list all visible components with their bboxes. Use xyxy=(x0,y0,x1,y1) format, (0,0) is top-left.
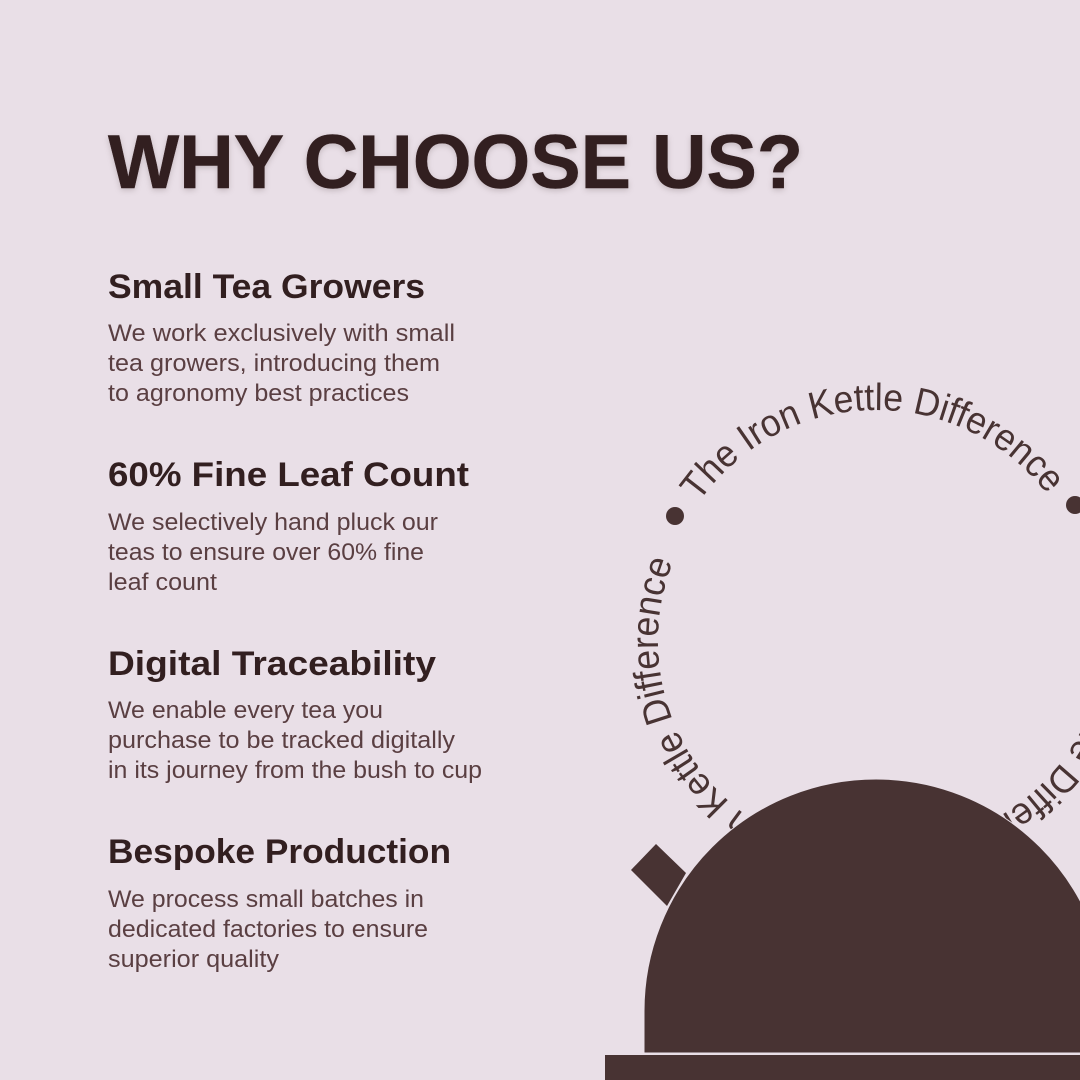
text: small tea growers description: to agronomy best practices xyxy=(108,380,409,407)
ring dot: left xyxy=(666,507,684,525)
text: fine leaf count description: teas to ensure over 60% fine xyxy=(108,539,424,566)
text: fine leaf count description: We selectively hand pluck our xyxy=(108,509,438,536)
panel: digital traceability xyxy=(108,645,482,784)
circular text ring xyxy=(632,382,1080,924)
text: small tea growers description: We work exclusively with small xyxy=(108,320,455,347)
text: digital traceability description: in its journey from the bush to cup xyxy=(108,757,482,784)
text: fine leaf count description: leaf count xyxy=(108,569,217,596)
heading: bespoke production: Bespoke Production xyxy=(108,833,451,871)
panel: small tea growers xyxy=(108,268,455,407)
text: digital traceability description: We enable every tea you xyxy=(108,697,383,724)
kettle spout xyxy=(631,844,686,906)
text: small tea growers description xyxy=(108,320,455,407)
kettle dome xyxy=(644,779,1080,1053)
heading: digital traceability: Digital Traceability xyxy=(108,645,436,683)
panel: fine leaf count xyxy=(108,456,469,596)
heading: small tea growers: Small Tea Growers xyxy=(108,268,425,306)
heading: fine leaf count: 60% Fine Leaf Count xyxy=(108,456,469,494)
kettle base xyxy=(605,1055,1080,1080)
ring text: top: The Iron Kettle Difference xyxy=(678,382,1059,495)
text: digital traceability description: purchase to be tracked digitally xyxy=(108,727,455,754)
text: bespoke production description: superior quality xyxy=(108,946,279,973)
text: small tea growers description: tea growers, introducing them xyxy=(108,350,440,377)
text: fine leaf count description xyxy=(108,509,438,596)
text: bespoke production description: We process small batches in xyxy=(108,886,424,913)
text: digital traceability description xyxy=(108,697,482,784)
ring dot: right xyxy=(1066,496,1080,514)
icon: kettle xyxy=(605,779,1080,1080)
panel: bespoke production xyxy=(108,833,451,973)
text: bespoke production description: dedicated factories to ensure xyxy=(108,916,428,943)
title: WHY CHOOSE US? xyxy=(108,120,803,205)
ring text: lower left: The Iron Kettle Difference xyxy=(632,558,742,830)
text: bespoke production description xyxy=(108,886,428,973)
